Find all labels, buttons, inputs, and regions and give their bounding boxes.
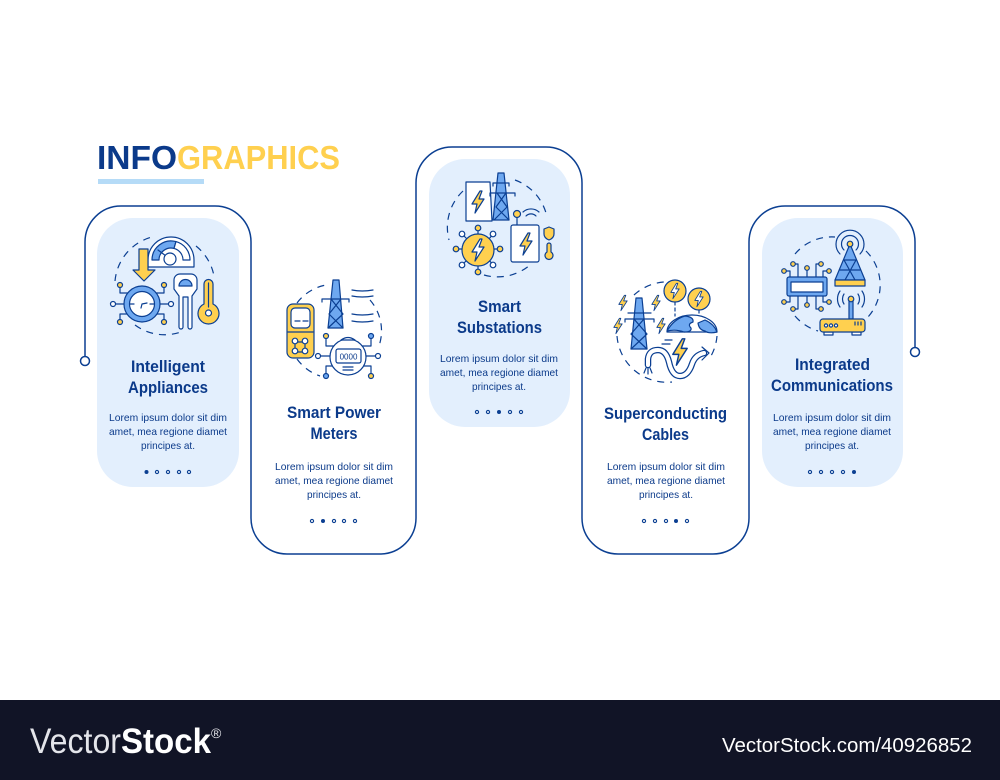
text block: principes at. (639, 489, 693, 501)
heading: Superconducting (604, 405, 727, 423)
heading: Smart Power (287, 404, 382, 422)
title (97, 139, 340, 184)
text block: Lorem ipsum dolor sit dim (607, 461, 725, 473)
footer bar (0, 700, 1000, 780)
heading (771, 356, 893, 395)
heading: Substations (457, 319, 542, 337)
pagination dots (310, 519, 357, 523)
heading: Integrated (795, 356, 870, 374)
title: GRAPHICS (177, 139, 340, 176)
heading (128, 358, 208, 397)
text block (773, 412, 891, 452)
text block (607, 461, 725, 501)
panel: integrated communications (762, 218, 903, 487)
title: INFO (97, 139, 177, 176)
text block: amet, mea regione diamet (773, 426, 891, 438)
pagination dots (475, 410, 523, 414)
panel: intelligent appliances (97, 218, 239, 487)
text block (440, 353, 558, 393)
text block: Lorem ipsum dolor sit dim (275, 461, 393, 473)
text block: principes at. (307, 489, 361, 501)
heading: Intelligent (131, 358, 205, 376)
heading (287, 404, 382, 443)
text block: amet, mea regione diamet (607, 475, 725, 487)
text block: Lorem ipsum dolor sit dim (109, 412, 227, 424)
icon: power meter: 0000 (340, 352, 358, 362)
footer id: VectorStock.com/40926852 (722, 735, 972, 757)
heading: Communications (771, 377, 893, 395)
heading (604, 405, 727, 444)
icon: appliances (110, 237, 219, 335)
heading: Appliances (128, 379, 208, 397)
text block: amet, mea regione diamet (440, 367, 558, 379)
panel: smart substations (429, 159, 570, 427)
icon: cables (614, 280, 717, 382)
footer logo (30, 722, 222, 761)
footer logo: ® (211, 725, 222, 741)
text block: principes at. (805, 440, 859, 452)
text block: amet, mea regione diamet (275, 475, 393, 487)
text block: Lorem ipsum dolor sit dim (773, 412, 891, 424)
icon: communications (782, 230, 880, 335)
pagination dots (144, 470, 191, 474)
text block: principes at. (472, 381, 526, 393)
text block: amet, mea regione diamet (109, 426, 227, 438)
heading: Cables (642, 426, 689, 444)
heading: Smart (478, 298, 521, 316)
footer logo: Stock (121, 722, 212, 761)
heading (457, 298, 542, 337)
icon: power meter (287, 280, 382, 378)
heading: Meters (310, 425, 358, 443)
text block (109, 412, 227, 452)
icon: substation (447, 173, 554, 277)
text block: Lorem ipsum dolor sit dim (440, 353, 558, 365)
panel: smart power meters (275, 280, 393, 523)
text block (275, 461, 393, 501)
pagination dots (808, 470, 856, 474)
connecting outline (80, 147, 920, 554)
panel: superconducting cables (604, 280, 727, 523)
pagination dots (642, 519, 689, 523)
footer logo: Vector (30, 722, 121, 761)
text block: principes at. (141, 440, 195, 452)
